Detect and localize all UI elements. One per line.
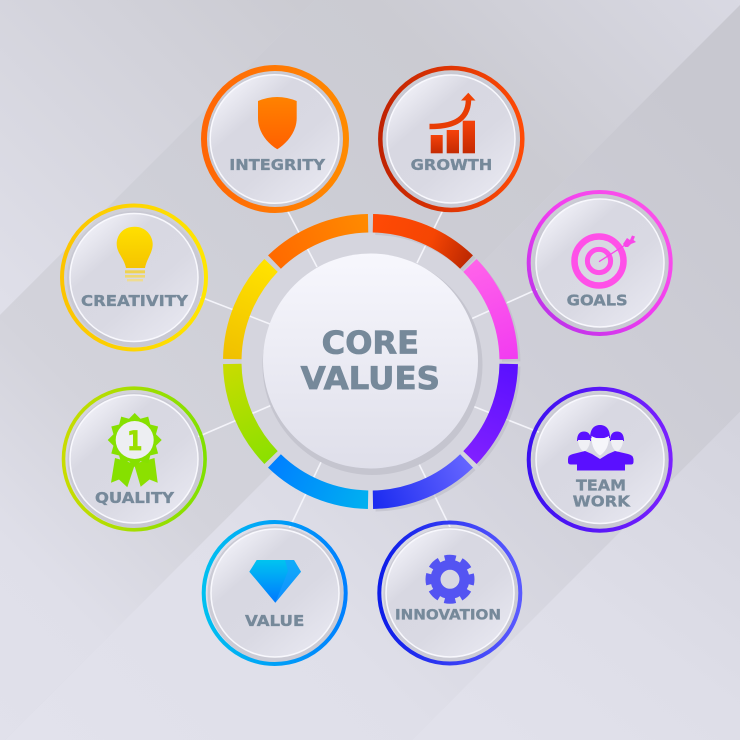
icon: light bulb: [117, 227, 153, 281]
icon: diamond: [249, 560, 301, 603]
hub backing band: [242, 232, 500, 490]
node: value: [204, 522, 346, 664]
label: value: VALUE: [245, 612, 304, 630]
label: integrity: INTEGRITY: [229, 156, 326, 174]
node: team work: [529, 389, 671, 531]
icon: shield: [258, 97, 297, 149]
icon: gear: [428, 558, 472, 601]
node: quality: [64, 388, 205, 530]
hub disc: [263, 254, 478, 468]
badge numeral: 1: [127, 426, 142, 457]
segmented colour ring: [232, 223, 511, 502]
label: goals: GOALS: [567, 292, 628, 310]
connector lines: [195, 204, 541, 529]
title: core values: [301, 325, 440, 397]
node: innovation: [379, 522, 520, 664]
node: growth: [380, 68, 522, 210]
label: creativity: CREATIVITY: [81, 292, 189, 310]
title: core values: VALUES: [301, 361, 440, 397]
node: integrity: [204, 68, 346, 210]
label: team work: TEAM: [576, 477, 626, 495]
label: innovation: INNOVATION: [395, 606, 501, 623]
icon: growth chart: [430, 93, 476, 153]
node: creativity: [62, 206, 206, 350]
label: quality: QUALITY: [95, 489, 175, 507]
icon: quality badge: [108, 413, 162, 487]
central hub: [262, 254, 482, 475]
node: goals: [529, 192, 671, 334]
label: growth: GROWTH: [411, 156, 492, 174]
label: team work: [573, 477, 631, 511]
label: team work: WORK: [573, 493, 631, 511]
title: core values: CORE: [322, 325, 419, 361]
icon: target with arrow: [574, 236, 636, 286]
icon: team: [568, 425, 634, 470]
